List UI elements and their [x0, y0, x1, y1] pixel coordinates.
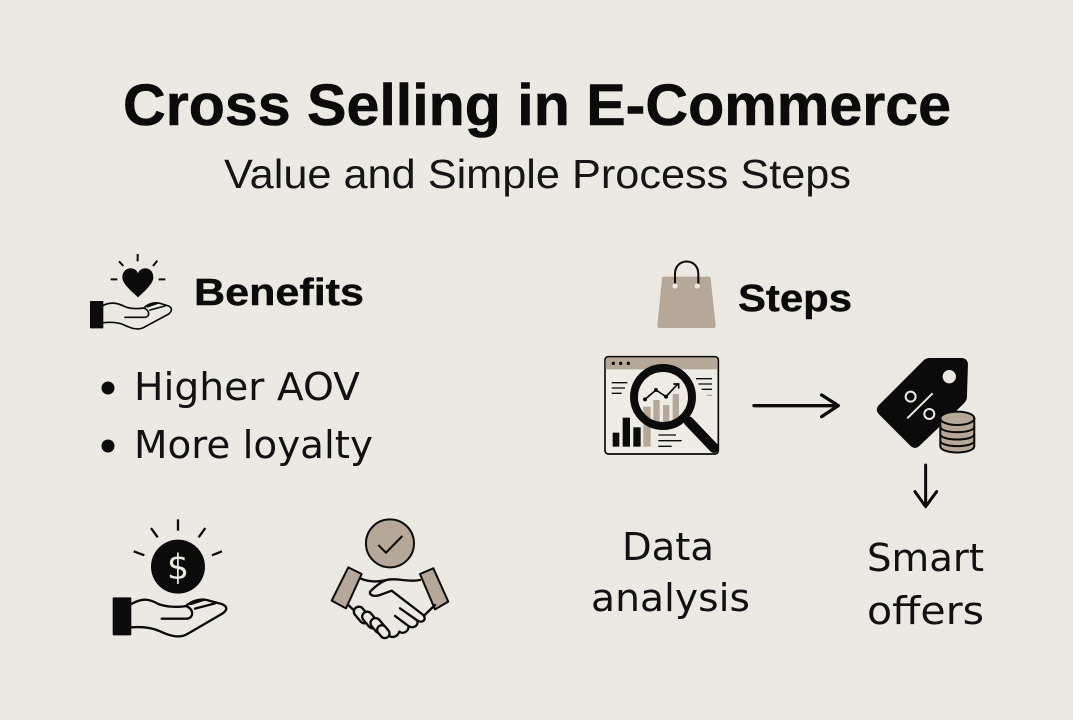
icon: data analysis dashboard with magnifier	[605, 357, 718, 454]
step label: data analysis: Data	[622, 525, 714, 569]
icon: discount tag and coins	[877, 358, 974, 452]
icon: hand holding dollar coin: $	[167, 548, 189, 588]
step label: smart offers	[867, 536, 984, 633]
subtitle: Value and Simple Process Steps	[224, 151, 851, 197]
step label: smart offers: offers	[867, 589, 984, 633]
heading: benefits: Benefits	[194, 272, 364, 314]
bullet list: Higher AOV	[134, 365, 360, 409]
step label: smart offers: Smart	[867, 536, 984, 580]
icon: hand holding heart	[90, 254, 171, 329]
heading: steps: Steps	[738, 278, 852, 320]
icon: handshake with check badge	[332, 519, 448, 640]
arrow: right	[754, 395, 838, 417]
icon: hand holding dollar coin	[113, 519, 226, 636]
icon: shopping bag	[657, 261, 716, 328]
step label: data analysis	[591, 525, 750, 620]
title: Cross Selling in E-Commerce	[123, 73, 951, 138]
panel: benefits	[90, 254, 448, 640]
panel: steps	[591, 261, 984, 633]
bullet list	[102, 365, 373, 467]
arrow: down	[915, 465, 937, 507]
bullet list: More loyalty	[134, 423, 373, 467]
step label: data analysis: analysis	[591, 576, 750, 620]
